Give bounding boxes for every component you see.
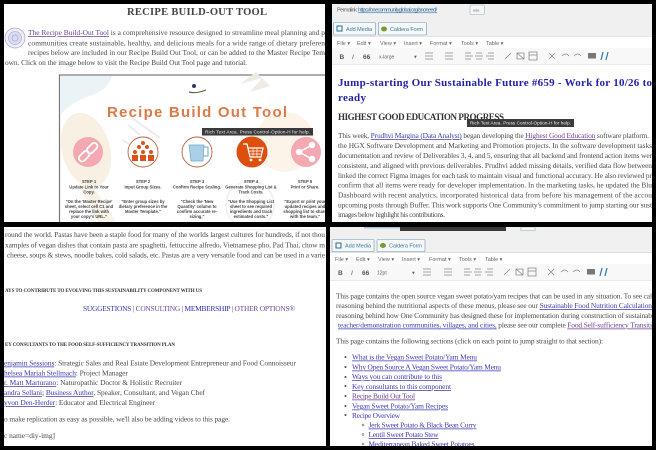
menu bar: Edit ▾ — [356, 257, 370, 263]
tooltip: rich text area: Rich Text Area. Press Control-Option-H for help. — [205, 130, 310, 134]
consultant list: enjamin Sessions: Strategic Sales and Real Estate Development Entrepreneur and Food Connoisseur — [4, 358, 297, 368]
menu bar: Tools ▾ — [461, 41, 478, 47]
post title: ready — [338, 92, 366, 104]
panel: weekly work post editor — [332, 4, 653, 222]
formatting toolbar — [332, 52, 652, 65]
add media button — [334, 22, 376, 35]
post body text: This week, Prudhvi Margina (Data Analyst) began developing the Highest Good Education software platform. — [338, 131, 649, 140]
step 2 text: dietary preference in the — [119, 204, 168, 209]
step 2 text — [119, 179, 168, 214]
step 4 text: Generate Shopping List & — [225, 184, 277, 190]
shortcode: c name=diy-img] — [4, 431, 55, 440]
formatting toolbar: I — [352, 54, 354, 61]
step 2 text: STEP 2 — [136, 179, 151, 184]
panel: sweet potato page editor — [330, 227, 652, 448]
intro paragraph: reasoning behind how One Community has designed these for implementation during construction of sustainab — [336, 311, 652, 320]
menu bar — [332, 36, 652, 45]
post title: Jump-starting Our Sustainable Future #659 - Work for 10/26 to — [338, 77, 652, 89]
step 5 text: Print or Share. — [291, 184, 319, 190]
step 1 text: "On the 'Master Recipe' — [66, 199, 112, 204]
post body text: consistent, and aligned with previous deliverables. Prudhvi added missing details, verified data flow between — [338, 161, 652, 170]
section list intro: This page contains the following sections (click on each point to jump straight to that section): — [336, 336, 603, 346]
consultant list — [4, 358, 297, 407]
menu bar: Insert ▾ — [402, 257, 420, 263]
pasta paragraph — [5, 230, 326, 260]
step 1 text: Copy. — [83, 190, 95, 194]
step 4 text: estimated costs." — [234, 214, 268, 219]
formatting toolbar: x-large — [379, 54, 395, 60]
add media button: Add Media — [346, 27, 373, 33]
post body text: documentation and review of Deliverables 3, 4, and 5, ensuring that all backend and frontend action items wer — [338, 151, 653, 160]
panel: pasta page and consultants — [4, 227, 326, 446]
pasta paragraph: round the world. Pastas have been a staple food for many of the worlds largest cultures for hundreds, if not thou — [5, 230, 325, 239]
step 4 text: "Use the Shopping List — [228, 199, 275, 204]
step 4 text: sheet to see required — [230, 204, 273, 209]
intro paragraph: This page contains the open source vegan sweet potato/yam recipes that can be used in any situation. To see cal — [336, 292, 652, 300]
step 4 text — [225, 179, 277, 219]
tooltip: rich text area: Rich Text Area. Press Control-Option-H for help. — [470, 120, 571, 126]
formatting toolbar: ▾ — [412, 270, 415, 276]
intro text: own. Click on the image below to visit the Recipe Build Out Tool page and tutorial. — [5, 58, 247, 67]
section list: Key consultants to this component — [352, 382, 452, 391]
formatting toolbar: B — [340, 54, 344, 61]
add media button — [332, 240, 374, 252]
heading: recipe build-out tool: RECIPE BUILD-OUT TOOL — [127, 7, 267, 18]
post body text — [338, 131, 653, 219]
menu bar: View ▾ — [378, 257, 394, 263]
intro text: The Recipe Build-Out Tool is a comprehensive resource designed to streamline meal planning and p — [28, 28, 325, 37]
section list: What is the Vegan Sweet Potato/Yam Menu — [352, 352, 477, 362]
intro paragraph: teacher/demonstration communities, villages, and cities, please see our complete Food Self-sufficiency Transiti — [338, 320, 652, 330]
menu bar: Table ▾ — [486, 41, 504, 47]
pasta paragraph: cheese, soups & stews, noodle bakes, cold salads, etc. Pastas are a very versatile food and can be used in a varie — [7, 250, 326, 260]
tooltip: rich text area — [202, 128, 313, 136]
step 2 text: Master Template." — [125, 209, 161, 214]
icon: step 2 people — [128, 137, 158, 167]
section list: Vegan Sweet Potato/Yam Recipes — [352, 402, 448, 410]
menu bar: Format ▾ — [429, 257, 451, 263]
icon: step 5 share — [291, 137, 321, 167]
icon: step 1 link — [73, 137, 103, 167]
icon: step 3 measuring cup — [182, 137, 212, 167]
consultant list: andra Sellani; Business Author, Speaker, Consultant, and Vegan Chef — [4, 388, 206, 397]
post body text: images below highlight his contributions. — [338, 210, 445, 219]
section list: Why Open Source A Vegan Sweet Potato/Yam Menu — [352, 362, 501, 372]
menu bar: Format ▾ — [430, 41, 452, 47]
recipe build out tool poster — [53, 72, 329, 229]
step 3 text: sizing." — [189, 214, 205, 219]
step 3 text: STEP 3 — [190, 179, 205, 184]
step 5 text: with the team." — [289, 214, 320, 219]
step 1 text: your copy's URL." — [71, 214, 107, 219]
intro paragraph: reasoning behind the nutritional aspects of these menus, please see our Sustainable Food Nutrition Calculation — [336, 301, 652, 310]
formatting toolbar — [330, 264, 652, 281]
caldera form button: Caldera Form — [390, 27, 423, 33]
consultant list: r. Matt Marturano: Naturopathic Doctor & Holistic Recruiter — [4, 378, 183, 387]
add media button: Add Media — [345, 244, 372, 250]
permalink row: Permalink: https://onecommunityglobal.org/anoneed/ — [337, 8, 437, 14]
step 5 text: "Export or print your — [284, 199, 326, 204]
step 3 text — [173, 179, 221, 219]
menu bar — [330, 252, 652, 264]
step 5 text — [284, 180, 325, 218]
post body text: Dashboard with recent analytics, incorporated historical data from before his management of the accou — [338, 190, 652, 200]
intro paragraph — [336, 292, 652, 330]
pasta paragraph: xamples of vegan dishes that contain pasta are spaghetti, fettuccine alfredo, Vietnamese pho, Pad Thai, chow m — [5, 240, 325, 250]
contribution links: SUGGESTIONS | CONSULTING | MEMBERSHIP | OTHER OPTIONS® — [83, 304, 295, 313]
step 3 text: Quantity' column to — [177, 204, 217, 209]
post body text: linked the correct Figma images for each task to maintain visual and functional accuracy. He also reviewed pr — [338, 171, 653, 180]
heading: key consultants: EY CONSULTANTS TO THE FOOD SELF-SUFFICIENCY TRANSITION PLAN — [5, 343, 175, 348]
step 1 text: Update Link to Your — [69, 184, 109, 190]
post body text: upcoming posts through Buffer. This work supports One Community's commitment to jump starting our sust — [338, 200, 653, 210]
caldera form button — [378, 22, 426, 35]
step 3 text: Confirm Recipe Scaling. — [173, 184, 221, 190]
section list: Jerk Sweet Potato & Black Bean Curry — [368, 420, 477, 430]
intro text: communities create sustainable, healthy, and delicious meals for a wide range of dietary preferen — [28, 38, 325, 48]
step 2 text: "Enter group sizes by — [121, 199, 165, 204]
panel: recipe build-out tool article — [4, 4, 330, 229]
formatting toolbar: 12pt — [377, 270, 387, 276]
post body text: the HGX Software Development and Marketing and Promotion projects. In the software development tasks — [338, 141, 652, 150]
decorative towel and ingredients — [53, 72, 315, 229]
permalink row — [337, 5, 484, 14]
section list: Recipe Overview — [352, 411, 401, 420]
formatting toolbar: ▾ — [414, 54, 417, 60]
step 4 text: STEP 4 — [244, 179, 259, 184]
step 5 text: shopping list to share — [283, 209, 327, 214]
step 4 text: Track Costs. — [239, 190, 263, 194]
tooltip: rich text area — [467, 119, 574, 127]
formatting toolbar: I — [351, 270, 353, 277]
intro text — [5, 28, 325, 67]
formatting toolbar: 66 — [363, 54, 371, 61]
intro text: recipes below are included in our Recipe Build Out Tool, or can be added to the Master Recipe Tem — [28, 48, 325, 57]
icon: round seal — [5, 28, 25, 48]
menu bar: View ▾ — [380, 41, 396, 47]
caldera form button: Caldera Form — [389, 244, 422, 250]
step 5 text: STEP 5 — [298, 179, 313, 184]
poster title: Recipe Build Out Tool — [107, 104, 287, 121]
permalink row: use — [473, 8, 480, 12]
step 3 text: "Check the 'New — [181, 199, 214, 204]
menu bar: Insert ▾ — [404, 41, 422, 47]
consultant list: yvon Den-Herder: Educator and Electrical Engineer — [4, 398, 156, 407]
step 1 text: sheet, select cell C1 and — [65, 204, 114, 209]
video note: o make replication as easy as possible, we'll also be adding videos to this page. — [4, 414, 230, 424]
formatting toolbar: 66 — [362, 270, 370, 277]
section list — [344, 352, 501, 448]
icon: step 4 shopping cart — [236, 136, 268, 168]
menu bar: Table ▾ — [485, 257, 503, 263]
post body text: confirm that all items were ready for developer implementation. In the marketing tasks, he updated the Blu — [338, 180, 652, 190]
step 4 text: ingredients and track — [230, 209, 273, 214]
section list: Recipe Build Out Tool — [352, 392, 415, 400]
step 1 text: replace the link with — [69, 209, 109, 214]
tooltip and permalink remnants — [364, 227, 535, 231]
menu bar: File ▾ — [335, 257, 348, 263]
step 3 text: confirm accurate re- — [177, 209, 218, 214]
step 1 text — [65, 179, 114, 219]
menu bar: Tools ▾ — [459, 257, 476, 263]
caldera form button — [377, 240, 425, 252]
step 2 text: Input Group Sizes. — [124, 184, 162, 190]
consultant list: helsea Mariah Stellmach: Project Manager — [4, 368, 129, 378]
section list: Mediterranean Baked Sweet Potatoes — [368, 440, 475, 448]
menu bar: File ▾ — [337, 41, 350, 47]
logo — [189, 84, 206, 93]
section heading: HIGHEST GOOD EDUCATION PROGRESS — [338, 112, 504, 122]
section list: Lentil Sweet Potato Stew — [368, 430, 439, 439]
step 1 text: STEP 1 — [82, 179, 97, 184]
menu bar: Edit ▾ — [357, 41, 371, 47]
step 5 text: updated recipes and — [285, 204, 326, 209]
formatting toolbar: B — [338, 270, 343, 277]
post title — [338, 77, 652, 104]
heading: ways to contribute: AYS TO CONTRIBUTE TO EVOLVING THIS SUSTAINABILITY COMPONENT WITH US — [5, 289, 202, 294]
section list: Ways you can contribute to this — [352, 372, 442, 381]
